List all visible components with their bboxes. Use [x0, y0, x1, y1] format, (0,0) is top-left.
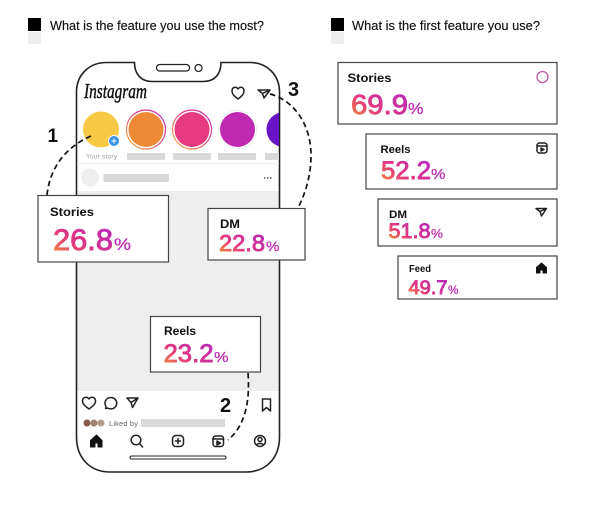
story labels: Your story [86, 154, 118, 160]
phone outline [76, 62, 280, 472]
connector 2 [228, 373, 248, 440]
icon: home [90, 435, 102, 447]
story: pink [172, 110, 212, 149]
bottom navigation [90, 435, 266, 447]
icon: profile [254, 436, 266, 446]
phone feed area [77, 191, 279, 391]
callout: DM most used: DM [220, 217, 240, 231]
home indicator [130, 456, 226, 459]
liked by: Liked by [109, 419, 138, 428]
icon: reels [213, 436, 224, 446]
callout number 3: 3 [288, 79, 299, 101]
callout: stories most used: 26.8 [53, 224, 113, 257]
heading: right question [331, 18, 540, 44]
panel: reels first used [366, 134, 557, 189]
story: violet [266, 112, 279, 146]
story: purple [218, 110, 256, 148]
logo: Instagram: Instagram [83, 79, 147, 103]
callout: reels most used: Reels [164, 324, 196, 338]
callout: reels most used [150, 316, 260, 372]
callout: reels most used: % [214, 350, 229, 366]
phone mockup [76, 62, 302, 472]
story: yours [83, 112, 119, 148]
callout: DM most used: 22.8 [219, 230, 265, 256]
icon: create [172, 436, 184, 446]
callout: stories most used: Stories [50, 205, 94, 219]
heading: left question: What is the feature you use the most? [50, 18, 264, 33]
panel: DM first used [378, 199, 557, 246]
panel: feed first used [398, 256, 557, 299]
callout: DM most used: % [266, 238, 280, 254]
callout: reels most used: 23.2 [164, 340, 214, 368]
icon: reels [537, 143, 547, 153]
panel: reels first used: Reels [380, 144, 410, 156]
icon: direct message [536, 208, 546, 216]
heading: left question [28, 18, 264, 44]
icon: story ring [537, 72, 548, 82]
story labels [86, 153, 279, 160]
icon: search [131, 435, 142, 447]
callout: stories most used: % [114, 235, 131, 254]
panel: stories first used [338, 62, 557, 124]
callout number 1: 1 [48, 126, 58, 147]
callout: stories most used [38, 196, 168, 262]
panel: reels first used: % [431, 167, 446, 183]
post actions [82, 397, 270, 411]
panel: stories first used: Stories [348, 71, 392, 85]
stories row [83, 110, 302, 149]
panel: stories first used: % [408, 101, 424, 118]
panel: reels first used: 52.2 [381, 157, 431, 185]
icon: home [536, 263, 546, 273]
connector 3 [270, 94, 311, 208]
panel: DM first used: 51.8 [388, 220, 430, 243]
callout: DM most used [208, 208, 305, 260]
panel: feed first used: Feed [409, 264, 431, 275]
panel: DM first used: % [431, 227, 443, 241]
speaker and camera [156, 64, 202, 72]
icon: heart [232, 87, 244, 99]
story: orange [126, 110, 166, 149]
panel: feed first used: 49.7 [408, 278, 448, 299]
connector 1 [47, 136, 91, 195]
panel: feed first used: % [448, 285, 458, 297]
icon: direct message [258, 90, 270, 98]
callout number 2: 2 [220, 395, 231, 417]
panel: DM first used: DM [389, 209, 407, 221]
post header [81, 168, 272, 186]
liked by [84, 419, 225, 428]
panel: stories first used: 69.9 [351, 89, 408, 120]
heading: right question: What is the first feature you use? [352, 18, 540, 33]
